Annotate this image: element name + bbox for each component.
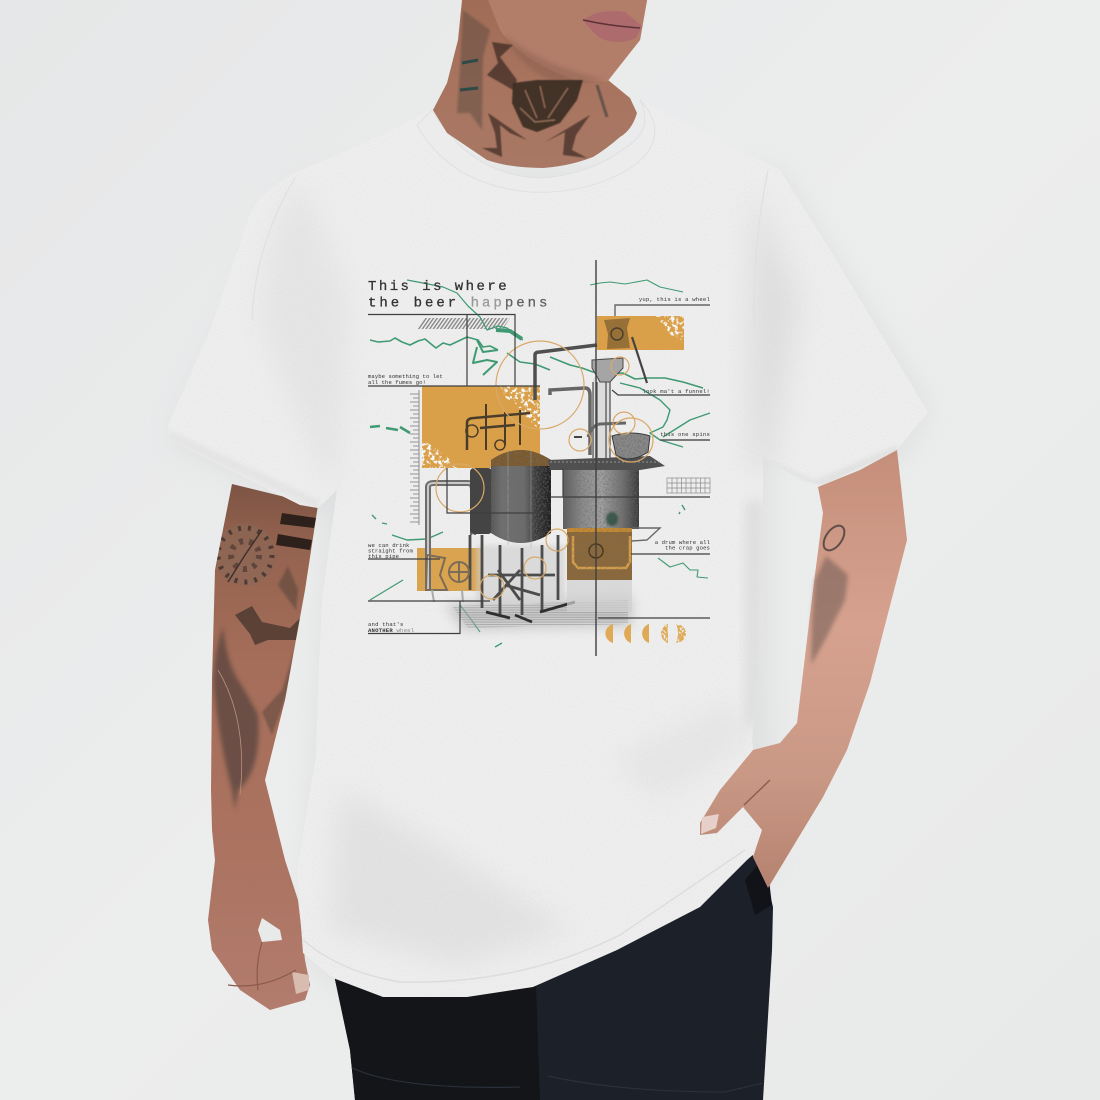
note: wheel: yup, this is a wheel (639, 296, 710, 303)
orange highlight circles (436, 341, 653, 599)
tattoo: cross and leaves (235, 606, 300, 645)
tattoo: neck bull (482, 42, 607, 158)
tattoo: clock (214, 524, 276, 586)
right arm with hand (700, 450, 907, 888)
ruler (410, 390, 419, 525)
tattoo: feather (214, 627, 259, 810)
hatched strip (417, 318, 510, 329)
shirt folds and shading (170, 22, 920, 992)
machine: legs and struts (470, 535, 575, 622)
note: fumes: maybe something to let (368, 373, 443, 380)
note: pipe: we can drink (368, 542, 410, 549)
note: funnel: look ma't a funnel! (642, 388, 710, 395)
note: drum: a drum where all (655, 539, 711, 546)
machine: floor (445, 596, 632, 630)
note: drum: the crap goes (665, 544, 710, 552)
machine: backdrop between legs (476, 545, 565, 605)
orange panel: large (422, 386, 540, 468)
note: fumes: all the fumes go! (368, 379, 426, 386)
title: This is where (368, 279, 509, 295)
collar rib (417, 100, 655, 192)
note: another wheel: ANOTHER wheel (368, 627, 414, 634)
note: pipe: straight from (368, 548, 413, 554)
machine: main tank (491, 450, 551, 548)
soft shadow behind model (168, 170, 930, 1000)
small grid (667, 478, 710, 493)
tattoo: forearm feather (819, 522, 849, 554)
orange panel: lower left (417, 548, 482, 591)
green veins (370, 280, 710, 647)
note: pipe: this pipe (368, 553, 399, 560)
machine: burner (567, 528, 660, 612)
title second line: the beer happens (368, 296, 550, 312)
machine: rear tank (470, 468, 492, 534)
machine: spinning bowl (574, 423, 650, 459)
machine: left pipework (428, 345, 597, 590)
printed design (368, 260, 711, 656)
neck and jaw (433, 0, 647, 168)
note: another wheel: and that's (368, 621, 404, 628)
note: spins: this one spins (660, 431, 710, 438)
lower-left gears (426, 555, 469, 602)
half moons (605, 624, 686, 643)
left arm with hand (208, 484, 318, 1010)
lips (583, 11, 642, 42)
wheel device and handle (604, 318, 647, 383)
machine: column and funnel (592, 357, 623, 458)
machine: right tank and platform (548, 456, 665, 529)
shirt (169, 100, 928, 997)
blueprint lines (368, 260, 710, 656)
t-shirt mockup scene (174, 0, 907, 1100)
trousers (333, 850, 773, 1100)
orange panel: wheel (597, 316, 684, 350)
tattoo: stripes (276, 513, 316, 550)
